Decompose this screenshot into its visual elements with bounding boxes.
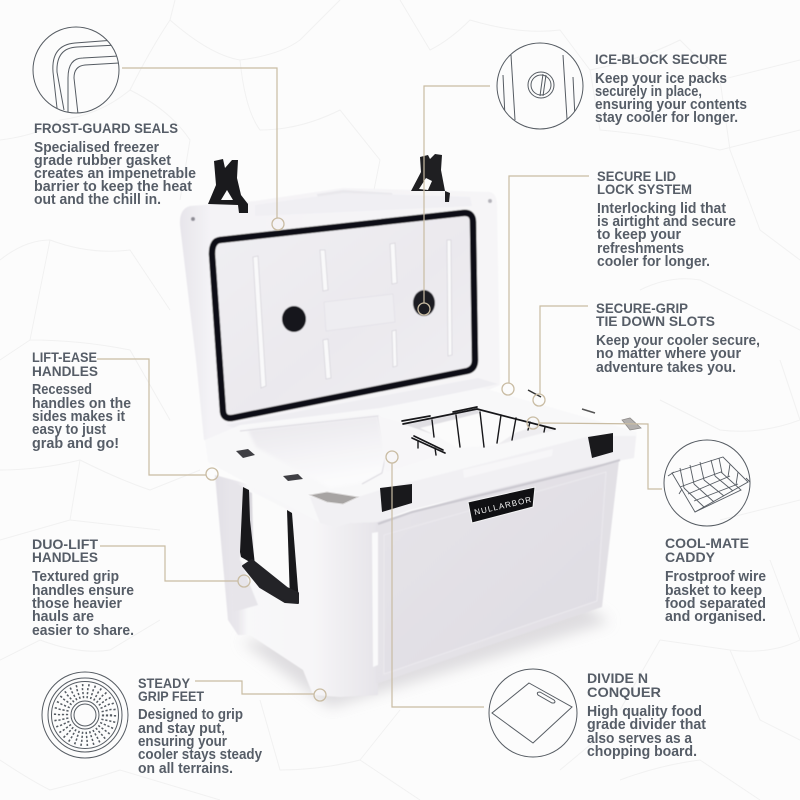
icon: wire caddy [664, 440, 750, 526]
tie down slot left [236, 449, 255, 458]
body: cool-mate caddy: food separated [665, 595, 766, 612]
body: frost-guard seals: creates an impenetrable [34, 165, 196, 182]
leader: divide n conquer [386, 451, 484, 707]
body: ice-block secure: stay cooler for longer. [595, 109, 738, 126]
body: lift-ease handles: handles on the [32, 395, 131, 412]
body: ice-block secure [595, 70, 747, 126]
body: divide n conquer: High quality food [587, 703, 702, 720]
leader: secure lid lock [502, 176, 589, 395]
leader: cool-mate caddy [527, 417, 662, 489]
icon: lid knob [497, 43, 583, 129]
rim front face [310, 436, 636, 527]
text block: lift-ease handles [32, 350, 131, 452]
body rim [205, 388, 637, 527]
body: cool-mate caddy [665, 568, 766, 625]
handle moulding on rim [463, 449, 553, 478]
body: lift-ease handles: Recessed [32, 381, 92, 398]
heading: steady grip feet [138, 676, 205, 704]
icon: seal corner [33, 27, 120, 114]
body: cool-mate caddy: Frostproof wire [665, 568, 766, 585]
text block: divide n conquer [587, 671, 706, 760]
lid knob left [282, 306, 306, 332]
heading: cool-mate caddy [665, 536, 749, 565]
cooler body [205, 388, 637, 697]
wire caddy basket [402, 407, 555, 455]
text block: secure-grip tie down slots [596, 301, 760, 376]
leader: ice-block secure [418, 86, 490, 315]
lid knob right [413, 290, 435, 316]
body: duo-lift handles: those heavier [32, 595, 122, 612]
text block: cool-mate caddy [665, 536, 766, 625]
body: secure lid lock system: to keep your [597, 226, 681, 243]
left side of body [215, 475, 380, 697]
right compartment opening [403, 409, 555, 448]
text block: ice-block secure [595, 52, 747, 126]
leader: lift-ease handles [97, 359, 218, 480]
body: frost-guard seals: grade rubber gasket [34, 152, 171, 169]
heading: secure lid lock system: LOCK SYSTEM [597, 182, 692, 197]
heading: secure lid lock system: SECURE LID [597, 169, 676, 184]
body: steady grip feet: cooler stays steady [138, 746, 263, 763]
front of body [376, 452, 620, 684]
body: secure lid lock system: refreshments [597, 240, 684, 257]
front latch left [380, 484, 412, 512]
body: frost-guard seals: out and the chill in. [34, 191, 161, 208]
body: steady grip feet: and stay put, [138, 720, 225, 737]
text block: steady grip feet [138, 676, 263, 777]
divider top [378, 416, 440, 472]
body: steady grip feet: on all terrains. [138, 760, 233, 777]
heading: secure-grip tie down slots: TIE DOWN SLOTS [596, 314, 715, 329]
lid brand emboss [324, 294, 395, 331]
lid latch left [208, 159, 248, 213]
heading: steady grip feet: GRIP FEET [138, 689, 205, 704]
body: secure-grip tie down slots: Keep your cooler secure, [596, 332, 760, 349]
body: lift-ease handles: easy to just [32, 421, 106, 438]
heading: lift-ease handles: LIFT-EASE [32, 350, 97, 365]
body: divide n conquer: also serves as a [587, 730, 693, 747]
body: frost-guard seals [34, 139, 196, 208]
body: frost-guard seals: barrier to keep the heat [34, 178, 192, 195]
tie down slot front [283, 474, 303, 481]
body: cool-mate caddy: and organised. [665, 608, 766, 625]
front recessed panel [384, 472, 606, 674]
heading: steady grip feet: STEADY [138, 676, 190, 691]
leader: frost-guard seals [122, 68, 284, 230]
strap left [240, 487, 255, 565]
tie down slot right [582, 409, 595, 413]
heading: duo-lift handles [32, 537, 99, 565]
body: cool-mate caddy: basket to keep [665, 582, 762, 599]
body: secure lid lock system [597, 200, 736, 270]
body: frost-guard seals: Specialised freezer [34, 139, 159, 156]
body: secure lid lock system: is airtight and secure [597, 213, 736, 230]
heading: duo-lift handles: DUO-LIFT [32, 537, 99, 552]
white corner rib [372, 532, 378, 667]
icon: chopping board [489, 669, 577, 757]
metal corner plate back [622, 418, 641, 430]
heading: divide n conquer: CONQUER [587, 685, 661, 700]
body: secure-grip tie down slots: adventure takes you. [596, 359, 736, 376]
body: secure lid lock system: cooler for longer. [597, 253, 710, 270]
body: duo-lift handles: hauls are [32, 608, 94, 625]
body: secure-grip tie down slots [596, 332, 760, 376]
heading: divide n conquer: DIVIDE N [587, 671, 648, 686]
left compartment [240, 416, 386, 488]
text block: secure lid lock system [597, 169, 736, 270]
tie down slot back [528, 390, 541, 397]
body: steady grip feet: ensuring your [138, 733, 227, 750]
lid latch right [411, 154, 450, 202]
body: lift-ease handles: grab and go! [32, 435, 119, 452]
grip handle [243, 560, 298, 603]
body: lift-ease handles: sides makes it [32, 408, 125, 425]
rubber gasket seal [212, 213, 475, 418]
heading: cool-mate caddy: COOL-MATE [665, 536, 749, 551]
body: duo-lift handles: handles ensure [32, 582, 134, 599]
icon: grip foot [42, 672, 128, 758]
body: secure-grip tie down slots: no matter where your [596, 345, 741, 362]
heading: secure-grip tie down slots: SECURE-GRIP [596, 301, 688, 316]
body: ice-block secure: ensuring your contents [595, 96, 747, 113]
lid ribs [253, 240, 452, 388]
heading: lift-ease handles [32, 350, 98, 379]
body: ice-block secure: securely in place, [595, 83, 702, 100]
heading: frost-guard seals: FROST-GUARD SEALS [34, 121, 178, 136]
cooler ground shadow [240, 598, 610, 708]
leader: secure-grip slots [533, 306, 588, 406]
heading: secure-grip tie down slots [596, 301, 715, 329]
heading: divide n conquer [587, 671, 661, 700]
cooler product image [180, 154, 641, 708]
body: divide n conquer [587, 703, 706, 760]
body: divide n conquer: grade divider that [587, 716, 706, 733]
body: steady grip feet [138, 706, 263, 777]
logo badge [468, 487, 535, 523]
text block: duo-lift handles [32, 537, 134, 639]
text block: frost-guard seals [34, 121, 196, 208]
body: secure lid lock system: Interlocking lid that [597, 200, 726, 217]
logo badge: NULLARBOR [473, 495, 532, 517]
leader: steady grip feet [195, 681, 326, 701]
body: duo-lift handles: Textured grip [32, 568, 119, 585]
heading: lift-ease handles: HANDLES [32, 364, 98, 379]
leader: duo-lift handles [100, 546, 250, 587]
heading: duo-lift handles: HANDLES [32, 550, 98, 565]
heading: cool-mate caddy: CADDY [665, 550, 715, 565]
handle recess [229, 480, 298, 612]
cooler lid [180, 188, 500, 445]
body: duo-lift handles: easier to share. [32, 622, 134, 639]
body: divide n conquer: chopping board. [587, 743, 697, 760]
body: ice-block secure: Keep your ice packs [595, 70, 727, 87]
front latch right [588, 433, 613, 458]
heading: ice-block secure: ICE-BLOCK SECURE [595, 52, 727, 67]
body: duo-lift handles [32, 568, 134, 639]
metal corner plate front [310, 492, 358, 504]
body: steady grip feet: Designed to grip [138, 706, 243, 723]
strap right [287, 510, 299, 602]
under-rim shadow [378, 460, 620, 524]
heading: secure lid lock system [597, 169, 692, 197]
body: lift-ease handles [32, 381, 131, 452]
